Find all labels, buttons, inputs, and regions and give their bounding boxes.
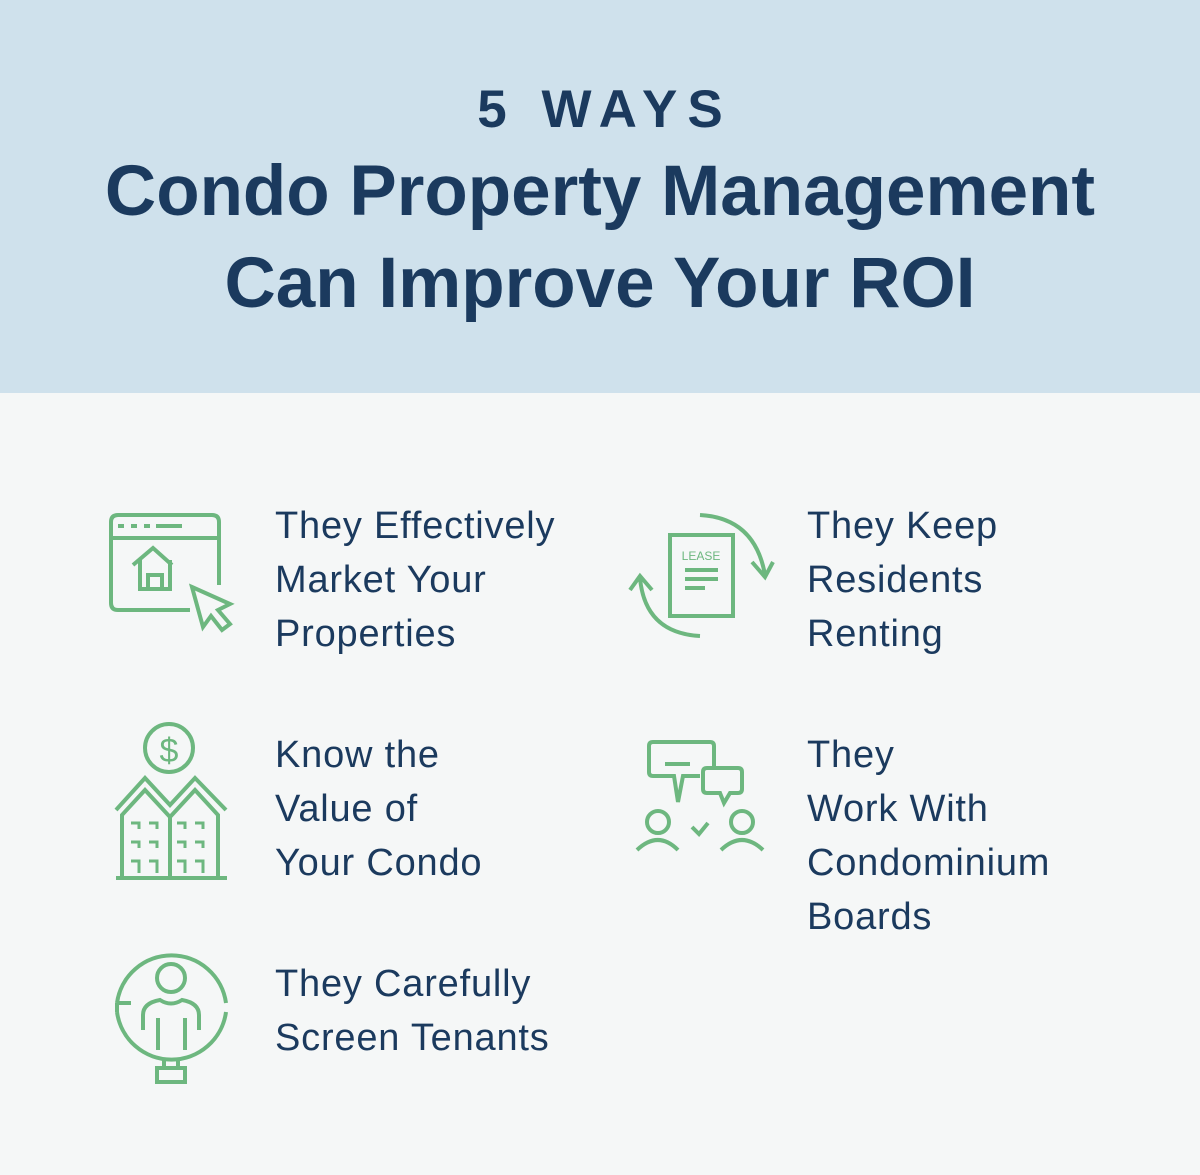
- text: screen: They Carefully: [275, 963, 531, 1005]
- icon: lease cycle: [630, 515, 773, 636]
- text: market: Market Your: [275, 559, 487, 601]
- icon: browser house: [111, 515, 230, 630]
- icon: screen tenant: [117, 955, 226, 1082]
- text: screen: Screen Tenants: [275, 1017, 550, 1059]
- icon: boards: [637, 742, 763, 850]
- title main: Can Improve Your ROI: [225, 244, 975, 323]
- text: market: They Effectively: [275, 505, 555, 547]
- icon: condo value: $: [160, 732, 179, 770]
- title kicker: 5 WAYS: [477, 80, 733, 139]
- text: market: Properties: [275, 613, 456, 655]
- text: boards: Work With: [807, 788, 989, 830]
- text: boards: Boards: [807, 896, 932, 938]
- title main: Condo Property Management: [105, 152, 1095, 231]
- header band: [0, 0, 1200, 393]
- icon: lease cycle: LEASE: [682, 549, 720, 563]
- text: boards: [807, 734, 1050, 938]
- text: screen: [275, 963, 550, 1059]
- text: value: [275, 734, 482, 884]
- text: market: [275, 505, 555, 655]
- text: value: Value of: [275, 788, 418, 830]
- text: value: Know the: [275, 734, 440, 776]
- text: boards: They: [807, 734, 895, 776]
- icon: condo value: [116, 724, 227, 878]
- text: boards: Condominium: [807, 842, 1050, 884]
- text: keep: [807, 505, 998, 655]
- title main: [105, 152, 1095, 323]
- text: keep: They Keep: [807, 505, 998, 547]
- text: keep: Renting: [807, 613, 944, 655]
- text: keep: Residents: [807, 559, 983, 601]
- text: value: Your Condo: [275, 842, 482, 884]
